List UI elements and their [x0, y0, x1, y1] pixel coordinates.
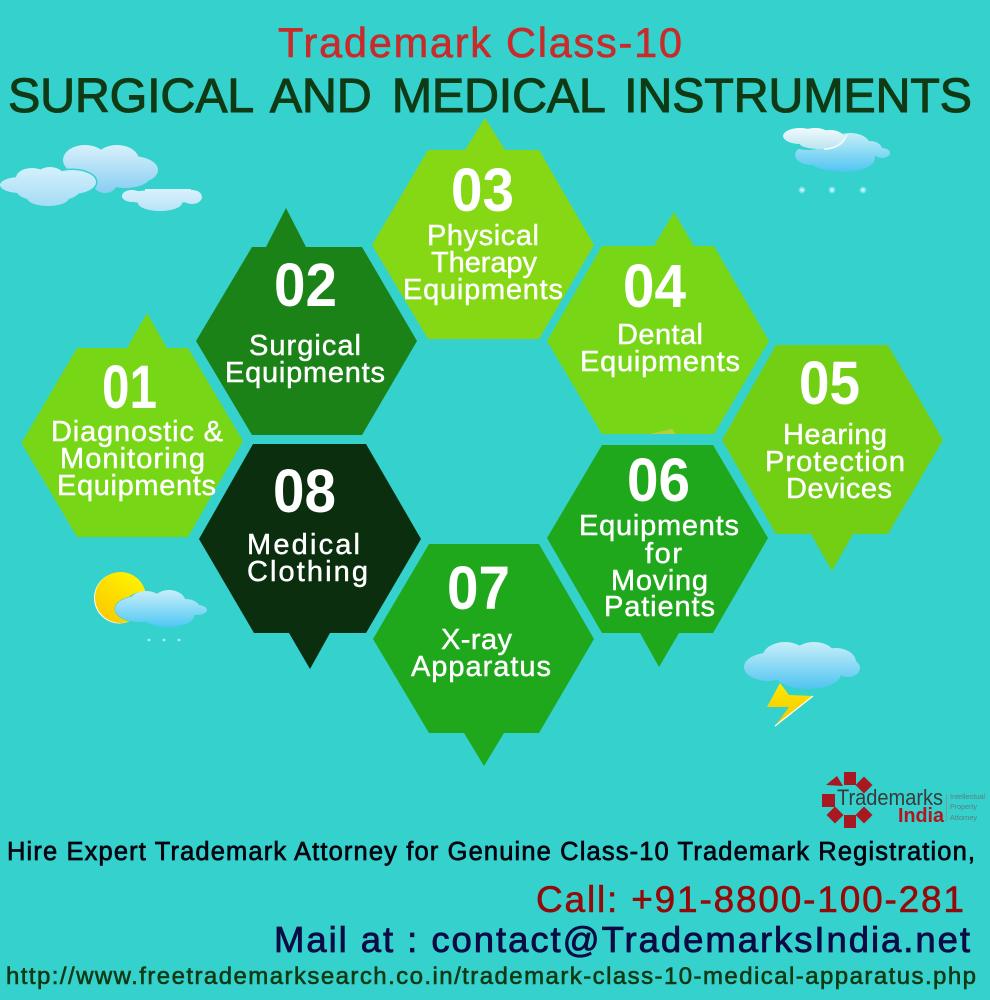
hexagon 02: Surgical Equipments: 02 [274, 251, 337, 319]
hexagon 02: Surgical Equipments: Surgical [249, 330, 361, 362]
icon: storm cloud with lightning [744, 642, 860, 726]
hexagon 05: Hearing Protection Devices: Protection [765, 446, 905, 478]
icon: clouds top right with rain [783, 128, 890, 194]
hexagon 05: Hearing Protection Devices: 05 [799, 349, 860, 417]
hexagon 06: Equipments for Moving Patients: 06 [627, 446, 690, 514]
logo: Trademarks India: Intellectual [950, 792, 985, 801]
hexagon 01: Diagnostic and Monitoring Equipments: 01 [102, 353, 157, 421]
hexagon 03: Physical Therapy Equipments: 03 [451, 156, 514, 224]
hexagon 04: Dental Equipments: Dental [617, 319, 703, 351]
hexagon 07: X-ray Apparatus: X-ray [441, 624, 512, 656]
rain dots [148, 639, 180, 641]
hexagon 01: Diagnostic and Monitoring Equipments: Equipments [57, 470, 216, 502]
hexagon 06: Equipments for Moving Patients: Patients [604, 591, 715, 623]
hexagon 03: Physical Therapy Equipments: Therapy [431, 247, 538, 279]
logo: Trademarks India: Property [950, 802, 977, 811]
lightning bolt [767, 683, 813, 726]
rain drops [798, 186, 866, 194]
hexagon 02: Surgical Equipments [196, 208, 417, 435]
hexagon 04: Dental Equipments [547, 212, 769, 434]
email: Mail at : contact@TrademarksIndia.net [274, 919, 970, 960]
hexagon 04: Dental Equipments: 04 [623, 252, 686, 320]
hexagon 05: Hearing Protection Devices [722, 345, 943, 571]
hexagon 05: Hearing Protection Devices: Hearing [783, 419, 887, 451]
footer call to action: Hire Expert Trademark Attorney for Genuine Class-10 Trademark Registration, [7, 838, 975, 866]
hexagon 04: Dental Equipments: Equipments [580, 346, 740, 378]
subtitle: Trademark Class-10: Trademark Class-10 [278, 19, 682, 66]
hexagon 02: Surgical Equipments: Equipments [225, 357, 385, 389]
hexagon 06: Equipments for Moving Patients: Equipments [579, 510, 739, 542]
hexagon 08: Medical Clothing: Clothing [247, 556, 368, 588]
hexagon 07: X-ray Apparatus: Apparatus [411, 651, 551, 683]
hexagon 07: X-ray Apparatus [373, 544, 594, 766]
hexagon 05: Hearing Protection Devices: Devices [786, 473, 892, 505]
hexagon 03: Physical Therapy Equipments: Equipments [403, 274, 563, 306]
logo: Trademarks India: India [898, 805, 945, 827]
logo: Trademarks India [822, 772, 985, 828]
hexagon 03: Physical Therapy Equipments [372, 118, 594, 339]
hexagon 08: Medical Clothing: 08 [273, 457, 336, 525]
hexagon 03: Physical Therapy Equipments: Physical [427, 220, 539, 252]
main heading: SURGICAL AND MEDICAL INSTRUMENTS [8, 69, 972, 123]
hexagon 08: Medical Clothing: Medical [247, 529, 360, 561]
hexagon 07: X-ray Apparatus: 07 [447, 554, 510, 622]
hexagon 06: Equipments for Moving Patients: for [645, 538, 682, 570]
phone number: Call: +91-8800-100-281 [536, 879, 964, 920]
logo: Trademarks India: Attorney [950, 813, 977, 822]
website url: http://www.freetrademarksearch.co.in/trademark-class-10-medical-apparatus.php [6, 963, 976, 990]
icon: sun behind cloud [94, 572, 207, 641]
hexagon 01: Diagnostic and Monitoring Equipments: Monitoring [60, 443, 205, 475]
hexagon 01: Diagnostic and Monitoring Equipments [22, 313, 243, 537]
hexagon 06: Equipments for Moving Patients: Moving [611, 565, 708, 597]
title [8, 19, 972, 123]
hexagon 01: Diagnostic and Monitoring Equipments: Diagnostic & [51, 416, 223, 448]
icon: clouds top left [0, 145, 202, 211]
hexagon 06: Equipments for Moving Patients [547, 445, 768, 667]
hexagon 08: Medical Clothing [199, 444, 421, 669]
logo: Trademarks India: Trademarks [837, 785, 943, 810]
